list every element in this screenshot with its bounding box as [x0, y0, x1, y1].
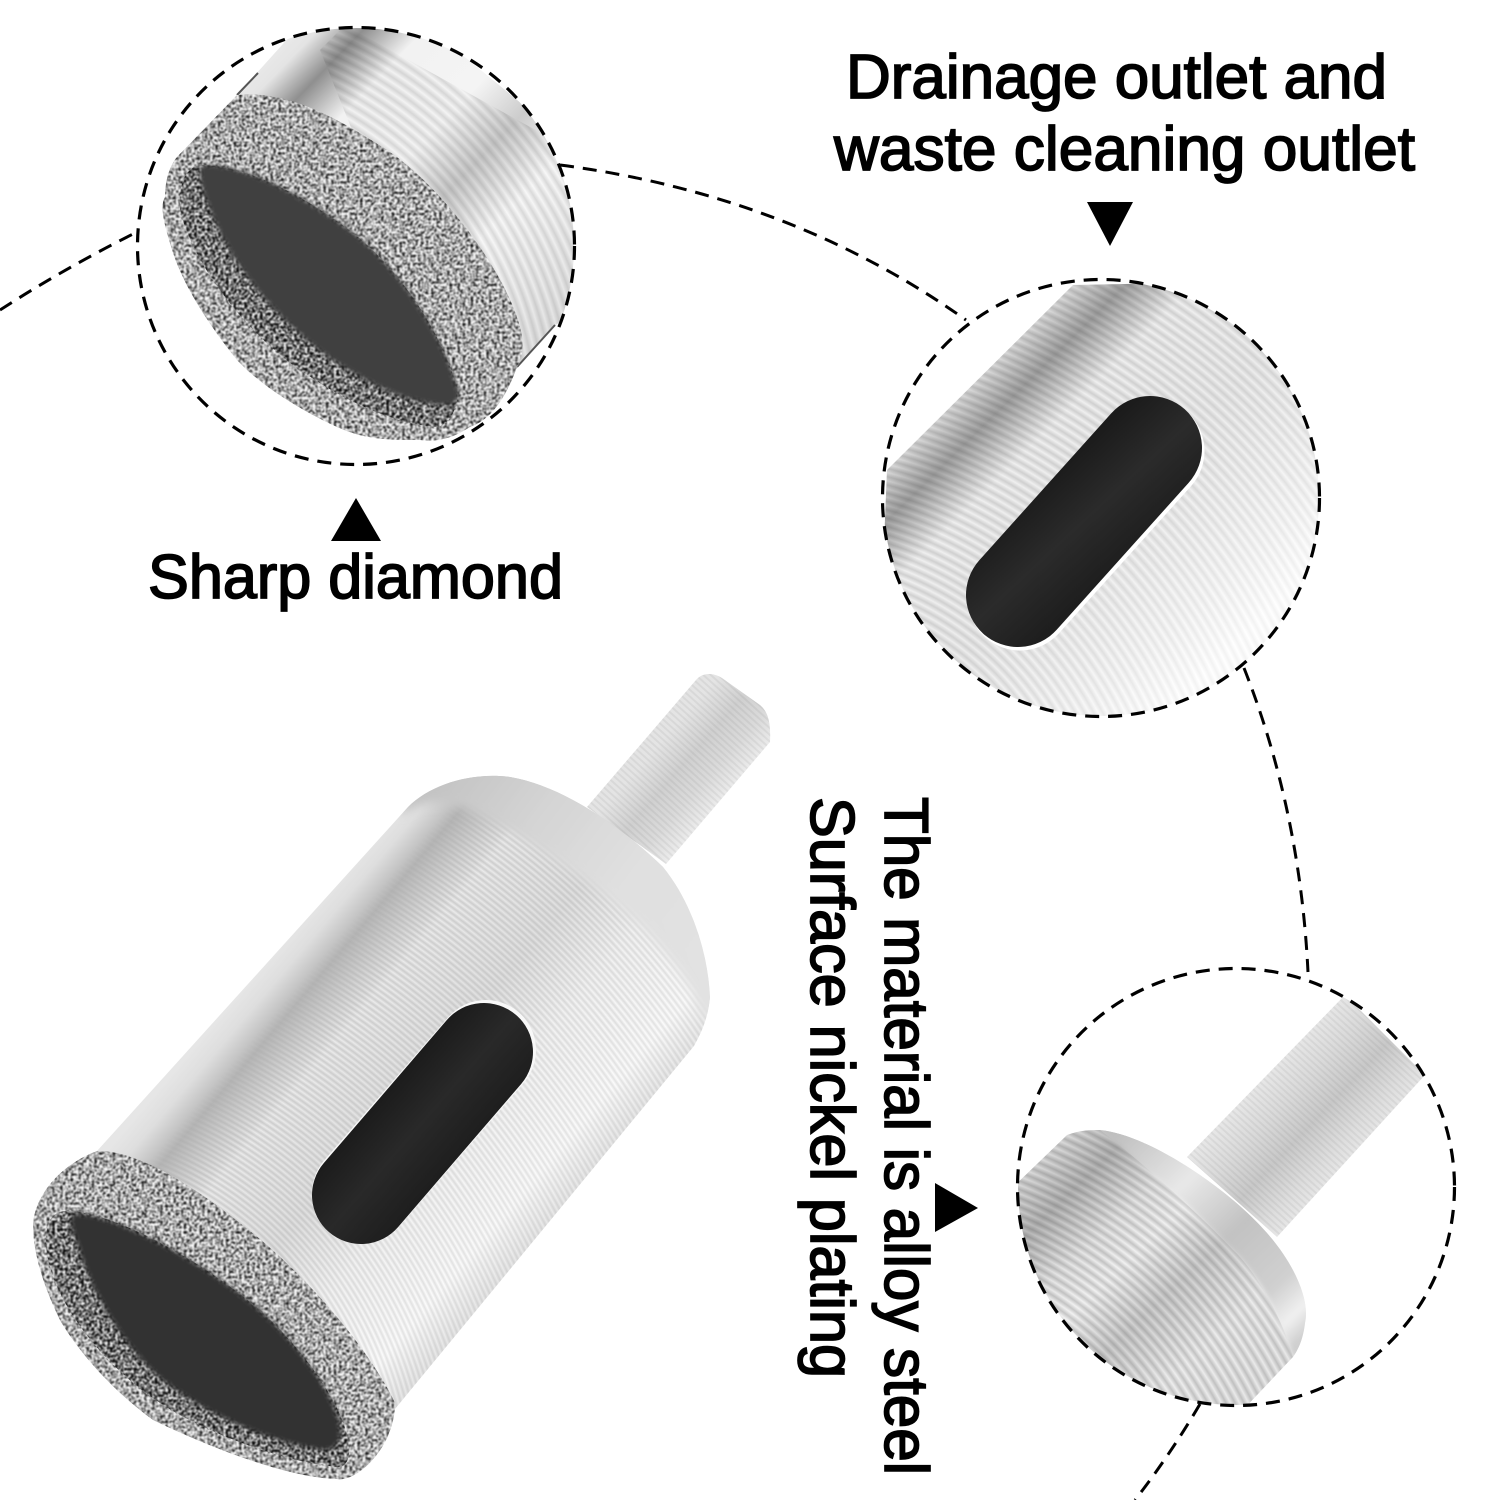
diamond close-up: abrasive ring	[163, 94, 523, 441]
outlet close-up: slot highlight	[1020, 451, 1152, 598]
panel: shank close-up circle	[1010, 968, 1454, 1420]
main product: diamond hole saw bit	[33, 674, 770, 1479]
main bit: abrasive diamond ring	[33, 1151, 395, 1479]
outlet close-up: dashed circle outline	[882, 280, 1320, 716]
heading: rotated material label: Surface nickel plating	[797, 797, 866, 1378]
arrow: triangle pointing up to diamond circle	[331, 498, 381, 541]
shank close-up: thin shank	[1187, 995, 1425, 1237]
heading: drainage outlet label	[833, 43, 1415, 184]
panel: outlet close-up circle	[880, 280, 1340, 730]
main bit: black drainage slot	[361, 1052, 484, 1195]
heading: drainage outlet label: waste cleaning outlet	[833, 115, 1415, 184]
arrow: triangle pointing down to outlet circle	[1087, 202, 1133, 246]
outlet close-up: steel body	[880, 280, 1340, 730]
panel: sharp diamond close-up circle	[138, 20, 590, 464]
connector: dashed line into diamond circle	[0, 233, 135, 310]
heading: drainage outlet label: Drainage outlet and	[846, 43, 1387, 112]
connector: dashed line from outlet circle to shank circle	[1244, 668, 1308, 972]
main bit: dark hollow	[71, 1214, 340, 1450]
diamond close-up: dark hollow	[200, 165, 458, 405]
heading: rotated material label	[797, 797, 940, 1475]
main bit: inner grit wall	[46, 1211, 349, 1467]
outlet close-up: black drainage slot	[1018, 448, 1150, 595]
connector: dashed line from diamond circle to outlet circle	[560, 165, 966, 320]
arrow: triangle pointing right to shank circle	[935, 1183, 978, 1232]
heading: sharp diamond label: Sharp diamond	[148, 543, 563, 612]
main bit: slot highlight	[362, 1050, 486, 1193]
diamond close-up: dashed circle outline	[138, 28, 574, 464]
shank close-up: rounded body head	[1018, 1130, 1306, 1405]
shank close-up: dashed circle outline	[1018, 968, 1454, 1406]
heading: rotated material label: The material is alloy steel	[871, 797, 940, 1475]
diamond close-up: inner grit wall	[180, 165, 458, 427]
main bit: cylindrical body	[90, 764, 722, 1420]
main bit: shank	[587, 674, 770, 864]
diamond close-up: steel body	[237, 20, 590, 367]
connector: dashed line leaving shank circle	[1135, 1404, 1200, 1500]
